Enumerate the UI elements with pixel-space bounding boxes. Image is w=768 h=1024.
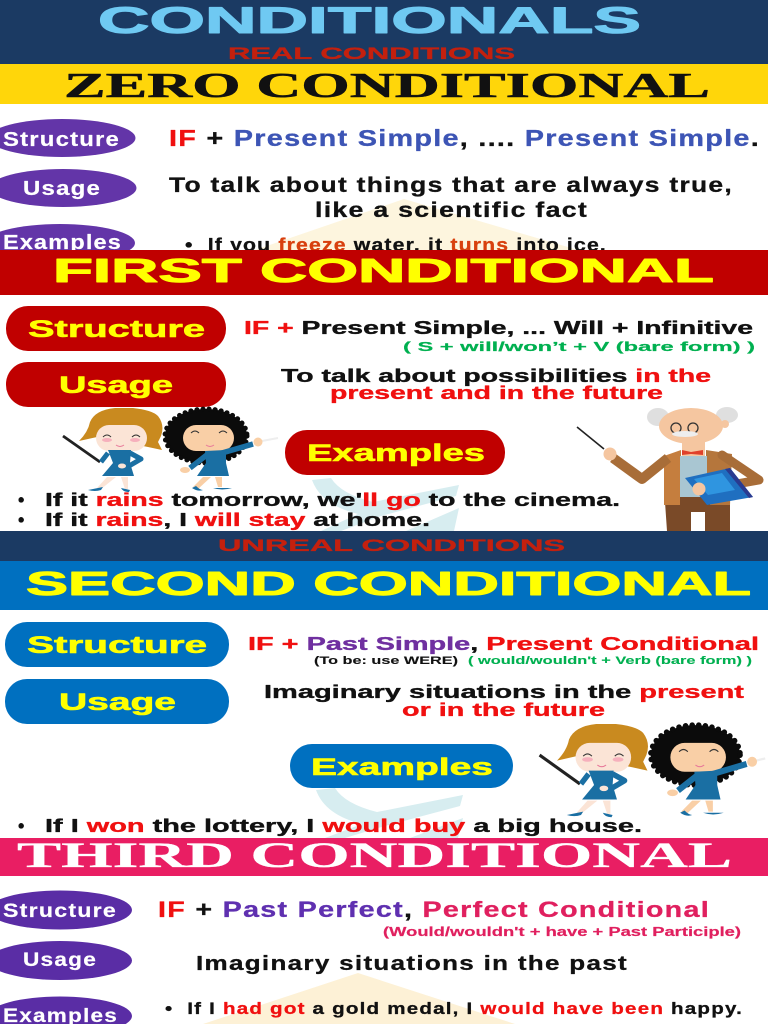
structure notes [314,655,752,667]
structure notes: (To be: use WERE) [314,655,458,667]
label: examples [285,430,505,475]
panel: third conditional [0,835,768,1024]
structure note: ( S + will/won’t + V (bare form) ) [403,339,755,354]
label: examples [290,744,513,788]
panel: first conditional [0,250,768,531]
label: examples [0,224,135,262]
label: structure [6,306,226,351]
example sentence: • If I had got a gold medal, I would have been happy. [165,999,743,1018]
label: structure: Structure [27,632,207,659]
usage text [169,174,733,222]
panel: zero conditional [0,64,768,262]
label: examples: Examples [3,232,122,254]
example sentences: If it rains tomorrow, we' ll go to the cinema. [45,490,620,510]
panel: header [0,0,768,64]
panel: unreal conditions banner [0,531,768,561]
label: examples: Examples [311,754,493,781]
example sentence: • [18,816,24,836]
usage text: Imaginary situations in the past [196,953,628,975]
watermark: pale blue shape [316,788,463,838]
example sentence: If I won the lottery, I would buy a big house. [45,816,642,836]
usage text: Imaginary situations in the present [264,682,744,702]
label: structure [5,622,229,667]
example sentence: • If you freeze water, it turns into ice. [185,235,607,255]
usage text: or in the future [402,700,605,720]
heading: third conditional: THIRD CONDITIONAL [17,835,732,875]
example sentences: • [18,490,24,510]
structure note: (Would/wouldn't + have + Past Participle) [383,924,741,939]
usage text: like a scientific fact [315,199,588,222]
structure formula: IF + Past Perfect , Perfect Conditional [158,897,710,922]
label: usage [0,941,132,980]
usage text [281,366,711,403]
label: structure: Structure [28,316,205,343]
watermark: beige shape [255,199,578,250]
label: usage: Usage [23,178,101,200]
label: structure: Structure [3,129,120,151]
subheading: unreal conditions: UNREAL CONDITIONS [218,536,565,555]
heading: second conditional: SECOND CONDITIONAL [26,565,751,602]
label: examples: Examples [307,440,485,467]
usage text [264,682,744,720]
heading: first conditional: FIRST CONDITIONAL [53,252,714,289]
subheading: real conditions: REAL CONDITIONS [228,44,515,63]
title: CONDITIONALS [98,0,641,41]
heading: zero conditional: ZERO CONDITIONAL [64,66,710,105]
label: structure: Structure [3,901,117,922]
label: structure [0,890,132,930]
watermark: pale blue shape [312,478,459,531]
structure formula: IF + Present Simple, ... Will + Infinitive [244,318,753,338]
label: usage: Usage [23,950,97,971]
label: usage: Usage [59,689,176,716]
usage text: To talk about things that are always true, [169,174,733,197]
example sentences: • [18,510,24,530]
watermark: beige shape [203,973,515,1024]
structure formula: IF + Past Simple , Present Conditional [248,634,759,654]
usage text: present and in the future [330,383,663,403]
structure formula: IF + Present Simple , .... Present Simple . [169,125,760,151]
usage text: To talk about possibilities in the [281,366,711,386]
example sentences: If it rains , I will stay at home. [45,510,430,530]
label: usage [5,679,229,724]
example sentences [18,490,620,530]
structure notes: ( would/wouldn't + Verb (bare form) ) [468,655,752,667]
panel: second conditional [0,561,768,838]
label: usage: Usage [59,372,173,399]
label: usage [0,169,136,207]
icon: two girl students [63,408,278,492]
icon: teacher [577,407,759,531]
label: examples [0,996,132,1024]
icon: two girl students [540,724,765,817]
label: usage [6,362,226,407]
label: structure [0,119,136,157]
